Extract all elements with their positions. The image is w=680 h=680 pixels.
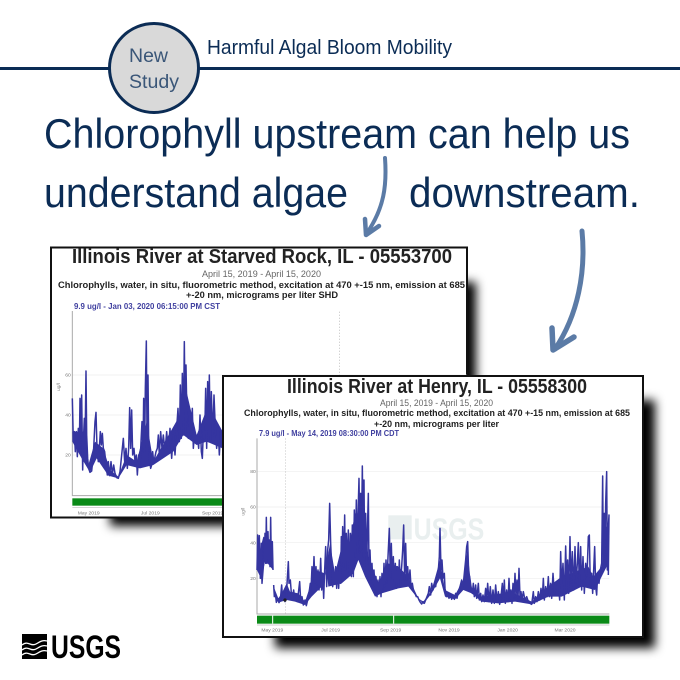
arrow: upstream to Starved Rock chart xyxy=(365,158,386,235)
line chart: Starved Rock: ug/l xyxy=(56,383,62,391)
line chart: Starved Rock: Jul 2019 xyxy=(141,510,160,516)
line chart: Henry: Sep 2019 xyxy=(380,628,402,634)
line chart: Henry: 60 xyxy=(250,505,256,511)
line chart: Henry: Mar 2020 xyxy=(554,628,576,634)
badge: New Study xyxy=(110,24,198,112)
line chart: Starved Rock: 60 xyxy=(65,373,71,379)
line chart: Henry: Jan 2020 xyxy=(497,628,518,634)
line chart: Henry: ug/l xyxy=(241,508,247,516)
line chart: Henry xyxy=(241,438,609,634)
line chart: Henry: 40 xyxy=(250,540,256,546)
line chart: Henry: May 2019 xyxy=(261,628,284,634)
headline: Chlorophyll upstream can help us xyxy=(44,110,630,157)
badge: New Study: New xyxy=(129,46,168,67)
header rule xyxy=(0,67,680,70)
headline xyxy=(44,110,640,216)
parameter description xyxy=(244,408,631,430)
line chart: Starved Rock: May 2019 xyxy=(78,510,100,516)
panel: Henry chart xyxy=(223,376,655,648)
line chart: Starved Rock xyxy=(56,311,467,516)
line chart: Starved Rock: 20 xyxy=(65,453,71,459)
logo: USGS: USGS xyxy=(51,629,121,665)
line chart: Henry: 80 xyxy=(250,469,256,475)
watermark: USGS xyxy=(388,512,484,546)
headline: understand algae xyxy=(44,169,348,216)
line chart: Henry: 20 xyxy=(250,576,256,582)
date range: April 15, 2019 - April 15, 2020 xyxy=(202,269,321,280)
parameter description xyxy=(58,280,466,301)
parameter description: +-20 nm, micrograms per liter xyxy=(374,419,499,430)
hover readout: 9.9 ug/l - Jan 03, 2020 06:15:00 PM CST xyxy=(74,301,221,311)
headline: downstream. xyxy=(409,169,640,216)
panel: Starved Rock chart xyxy=(51,246,476,526)
line chart: Starved Rock: Sep 2019 xyxy=(202,510,224,516)
hover readout: 7.9 ug/l - May 14, 2019 08:30:00 PM CDT xyxy=(259,428,400,438)
line chart: Starved Rock: 40 xyxy=(65,413,71,419)
line chart: Henry: Nov 2019 xyxy=(438,628,460,634)
parameter description: +-20 nm, micrograms per liter SHD xyxy=(186,290,338,301)
parameter description: Chlorophylls, water, in situ, fluorometric method, excitation at 470 +-15 nm, emission at 685 xyxy=(58,280,466,291)
badge: New Study: Study xyxy=(129,72,180,93)
date range: April 15, 2019 - April 15, 2020 xyxy=(380,398,493,409)
topic label: Harmful Algal Bloom Mobility xyxy=(207,37,452,59)
parameter description: Chlorophylls, water, in situ, fluorometric method, excitation at 470 +-15 nm, emission at 685 xyxy=(244,408,631,419)
panel title: Starved Rock: Illinois River at Starved Rock, IL - 05553700 xyxy=(72,246,452,268)
logo: USGS xyxy=(22,629,121,665)
panel title: Henry: Illinois River at Henry, IL - 05558300 xyxy=(287,376,587,398)
watermark: USGS: USGS xyxy=(414,512,484,546)
line chart: Henry: Jul 2019 xyxy=(321,628,340,634)
arrow: downstream to Henry chart xyxy=(552,231,583,350)
